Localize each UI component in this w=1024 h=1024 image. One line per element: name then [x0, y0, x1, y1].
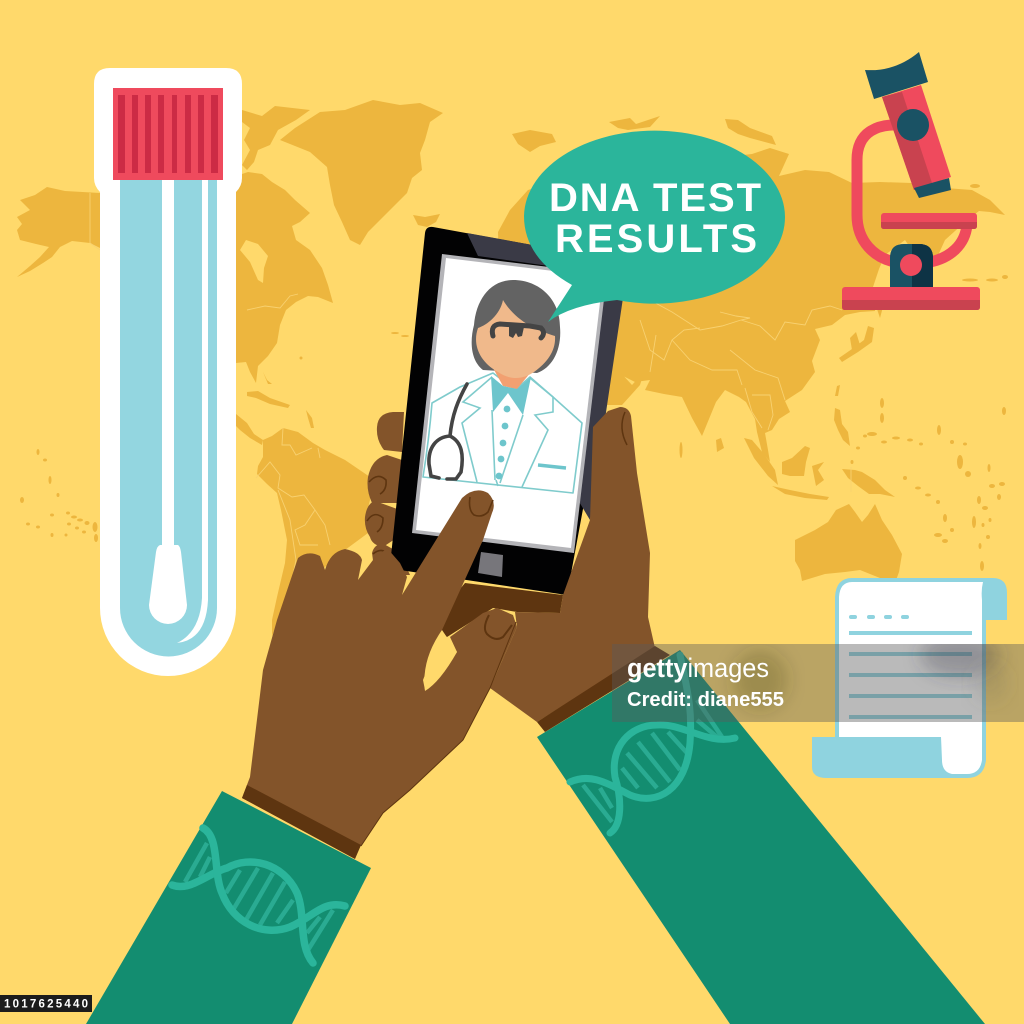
- doctor: collar: [491, 376, 531, 415]
- right sleeve: [537, 650, 985, 1024]
- tube: white body: [94, 68, 242, 676]
- map: Philippines: [834, 408, 850, 446]
- map: mainland North America: [236, 172, 333, 383]
- tube: blue liquid: [120, 180, 217, 656]
- right sleeve: fabric: [537, 650, 985, 1024]
- map: South America: [257, 428, 370, 636]
- phone: white screen: [416, 258, 603, 548]
- bubble shape: [524, 131, 785, 322]
- doctor: buttons: [496, 406, 510, 479]
- tube: highlight: [177, 180, 208, 643]
- microscope: arm: [857, 125, 967, 262]
- watermark: blurred patches: [732, 633, 1008, 710]
- doctor: coat details: [462, 377, 553, 487]
- smartphone: [391, 227, 627, 594]
- test tube with swab: [94, 68, 242, 676]
- map: Australia: [795, 504, 902, 583]
- doctor: hair: [472, 280, 560, 373]
- microscope: [842, 52, 980, 310]
- paper: text lines: [849, 631, 972, 719]
- map: Sri Lanka and Taiwan: [716, 385, 840, 452]
- hand edge line: [361, 622, 516, 846]
- finger 3: [365, 501, 400, 547]
- microscope: base: [842, 287, 980, 310]
- speech bubble: [524, 131, 785, 322]
- map: Sumatra: [744, 438, 778, 485]
- map: Iceland: [413, 214, 440, 227]
- map: Arctic Russia islands: [512, 116, 776, 152]
- doctor: pocket: [538, 465, 566, 468]
- phone: black body: [391, 227, 627, 594]
- paper scroll report: [812, 578, 1007, 778]
- wrist band: [242, 785, 361, 859]
- map: Central America: [236, 414, 263, 445]
- shade below phone: [430, 583, 563, 637]
- doctor: neck: [493, 368, 531, 389]
- right sleeve: DNA helix: [570, 655, 735, 833]
- holding hand: [430, 407, 670, 732]
- map: Java chain: [772, 486, 829, 500]
- wrist band: [537, 646, 670, 732]
- microscope: pillar: [890, 244, 933, 287]
- thumb nail: [485, 615, 512, 639]
- map: Sulawesi: [812, 462, 824, 486]
- map: Pacific islands, left: [20, 449, 98, 542]
- bubble text: [549, 176, 761, 261]
- doctor: coat: [423, 373, 582, 493]
- left sleeve: DNA helix: [172, 828, 345, 963]
- back fingers of holding hand: [365, 412, 410, 575]
- microscope: eyepiece: [865, 52, 928, 99]
- map: Greenland: [280, 100, 443, 245]
- paper: blue outline and curl: [812, 578, 1007, 778]
- palm and thumb: [490, 407, 655, 722]
- hand shape: [242, 490, 517, 858]
- paper: white sheet: [839, 582, 983, 774]
- microscope: stage: [881, 213, 977, 229]
- watermark band: [612, 644, 1024, 722]
- pointing hand: [242, 490, 517, 859]
- map: Borneo: [782, 446, 810, 476]
- knuckle creases: [367, 476, 391, 556]
- doctor: glasses: [492, 324, 544, 338]
- doctor portrait: [423, 280, 582, 493]
- phone: screen frame: [412, 254, 607, 553]
- phone: home button: [478, 552, 503, 577]
- map: Caribbean islands: [247, 372, 314, 428]
- watermark: getty logo: gettyimages: [627, 653, 769, 683]
- index nail: [470, 497, 493, 516]
- map: country borders: [90, 193, 851, 600]
- doctor: face: [476, 300, 555, 378]
- tube: cap: [113, 88, 223, 180]
- finger 2: [368, 455, 402, 503]
- bubble text: RESULTS: [555, 217, 757, 261]
- map: New Guinea: [842, 469, 895, 497]
- phone: dark reflection: [467, 233, 627, 520]
- microscope: focus knob: [897, 109, 929, 141]
- finger 4: [372, 543, 410, 575]
- image id tag: [0, 995, 92, 1012]
- map: mid-Atlantic dots: [300, 332, 409, 360]
- map: Pacific islands, right: [680, 184, 1008, 571]
- left sleeve: fabric: [86, 791, 371, 1024]
- tag number: 1017625440: [4, 998, 88, 1010]
- watermark: background: [612, 644, 1024, 722]
- world map: [17, 100, 1008, 636]
- microscope: body tube: [882, 85, 951, 198]
- watermark: credit: Credit: diane555: [627, 689, 784, 711]
- bubble text: DNA TEST: [549, 176, 761, 220]
- yellow gap between finger and thumb: [424, 630, 457, 691]
- thumb nail line: [622, 412, 627, 445]
- tube: swab: [149, 180, 187, 624]
- map: Alaska: [17, 187, 104, 277]
- map: Europe and Asia: [498, 148, 1005, 462]
- map: Korea and Sakhalin: [850, 295, 884, 350]
- map: Arctic Canada islands: [242, 106, 310, 170]
- map: Arabia edge: [606, 355, 644, 405]
- tag background: [0, 995, 92, 1012]
- finger 1: [377, 412, 404, 452]
- left sleeve: [86, 791, 371, 1024]
- map: Japan: [839, 326, 874, 362]
- paper: text dashes: [849, 615, 909, 619]
- doctor: stethoscope: [429, 384, 467, 479]
